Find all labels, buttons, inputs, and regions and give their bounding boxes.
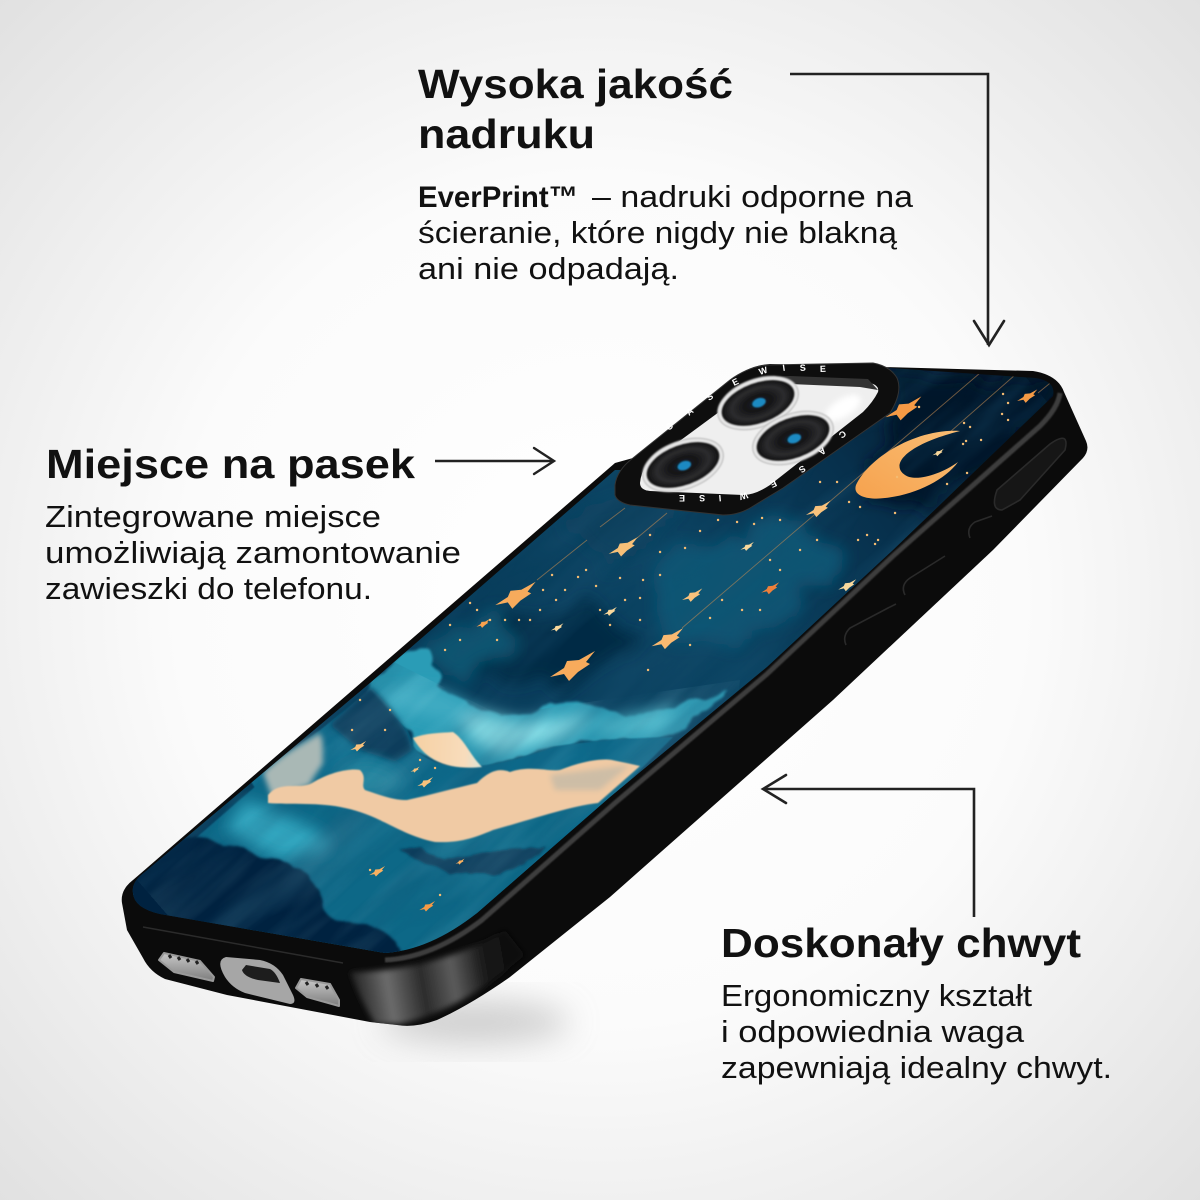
ring lettering: CASEWISE — [679, 428, 848, 503]
hanging gold threads — [537, 373, 1060, 628]
speaker grille right — [296, 979, 339, 1006]
body text: grip: i odpowiednia waga — [721, 1014, 1025, 1049]
teal layer beneath the curve — [250, 690, 673, 915]
heading: strap slot: Miejsce na pasek — [46, 441, 415, 487]
case body — [122, 364, 1087, 1026]
heading: print quality: Wysoka jakość — [418, 61, 733, 107]
peach moon glow — [413, 732, 482, 768]
inner ring shading — [770, 376, 878, 390]
dark ridge lower-right — [397, 847, 550, 873]
sky colour patches — [420, 380, 1060, 690]
grey left cloud — [263, 733, 323, 797]
ring lettering — [664, 363, 848, 503]
tiny star dots — [352, 394, 1008, 895]
peach cloud band — [268, 759, 640, 842]
heading: print quality: nadruku — [418, 111, 595, 157]
body text: strap slot: zawieszki do telefonu. — [45, 571, 372, 606]
body text: strap slot: umożliwiają zamontowanie — [45, 535, 461, 570]
bottom rim line — [143, 927, 343, 963]
body text: print quality — [418, 179, 914, 286]
arrow: print quality — [790, 74, 1004, 345]
body text: strap slot: Zintegrowane miejsce — [45, 499, 381, 534]
body text: grip: Ergonomiczny kształt — [721, 978, 1032, 1013]
arrow: grip — [763, 775, 974, 917]
callout: grip — [721, 920, 1112, 1085]
speaker grille left — [159, 953, 214, 981]
crescent moon — [855, 431, 960, 499]
ring lettering: CASEWISE — [664, 363, 826, 432]
body text: strap slot — [45, 499, 461, 606]
heading: print quality — [418, 61, 733, 157]
callout: strap slot — [45, 441, 461, 606]
side rail highlight — [385, 393, 1060, 960]
dark navy lower-left — [132, 836, 402, 953]
lower teal area — [133, 787, 536, 953]
stars — [350, 389, 1037, 912]
lens left — [635, 428, 731, 502]
body text: print quality: ani nie odpadają. — [418, 251, 679, 286]
body text: print quality: EverPrint™ — [418, 181, 578, 214]
phone body highlight — [821, 390, 865, 426]
phone drop shadow — [380, 1000, 570, 1044]
bottom corner gloss — [350, 938, 504, 1026]
arrow: strap slot — [435, 448, 554, 474]
lens right — [745, 401, 841, 475]
artwork: night sky screen — [132, 368, 1054, 953]
heading: grip: Doskonały chwyt — [721, 920, 1081, 966]
body text: print quality: – nadruki odporne na — [592, 179, 914, 214]
camera island — [615, 363, 899, 515]
side buttons — [845, 438, 1066, 645]
bright cloud band — [370, 647, 727, 767]
phone case illustration — [122, 362, 1088, 1026]
dark streaks over sky — [198, 370, 1046, 828]
body text: print quality: ścieranie, które nigdy nie blakną — [418, 215, 898, 250]
diagonal watercolour streaks — [138, 662, 717, 950]
callout: print quality — [418, 61, 914, 286]
charging port — [220, 957, 294, 1004]
lens top — [710, 366, 806, 440]
dark ridge by the peach moon — [330, 687, 413, 762]
body text: grip: zapewniają idealny chwyt. — [721, 1050, 1112, 1085]
camera window — [640, 379, 878, 495]
body text: grip — [721, 978, 1112, 1085]
teal cloud puff — [330, 760, 410, 800]
